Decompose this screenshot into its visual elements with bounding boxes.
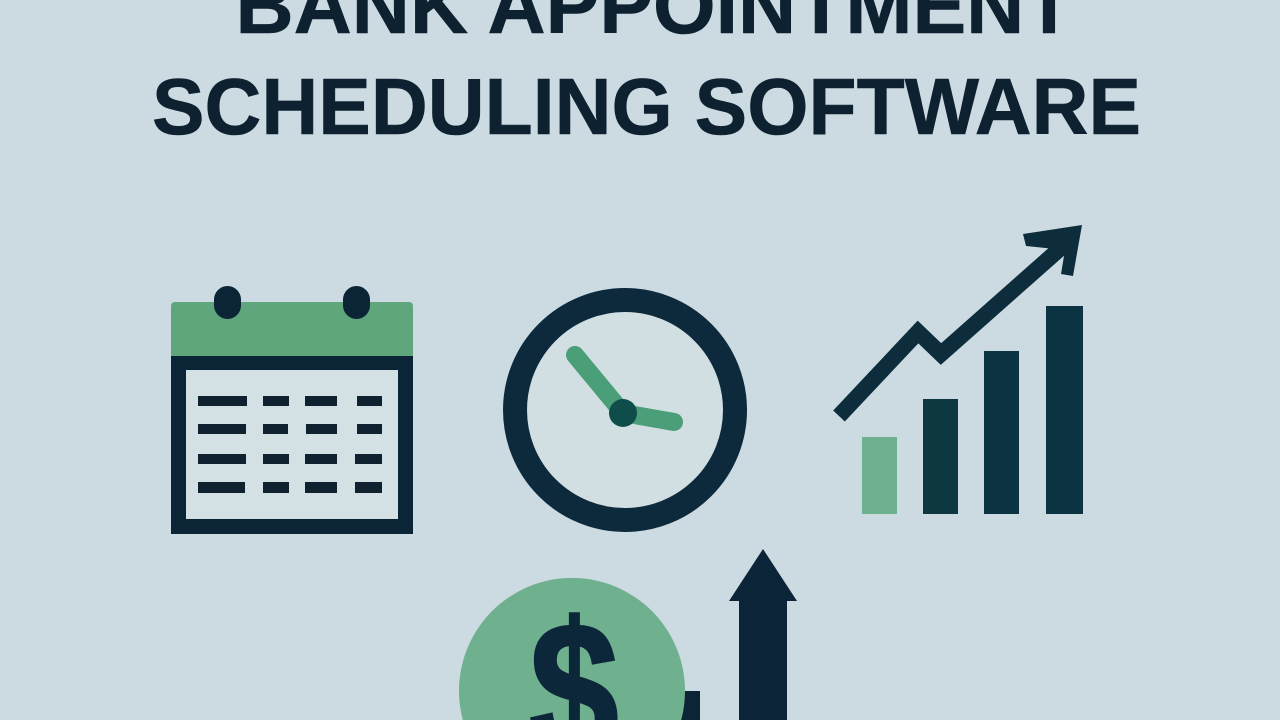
icon: clock xyxy=(515,300,735,520)
icon: growth bar chart with arrow xyxy=(839,225,1083,514)
title: SCHEDULING SOFTWARE xyxy=(152,62,1141,151)
icon: dollar coin xyxy=(459,578,685,720)
icon: calendar xyxy=(171,286,413,534)
arrow: upward xyxy=(729,549,797,720)
title xyxy=(152,0,1141,151)
icon: small bar behind coin xyxy=(670,691,700,720)
